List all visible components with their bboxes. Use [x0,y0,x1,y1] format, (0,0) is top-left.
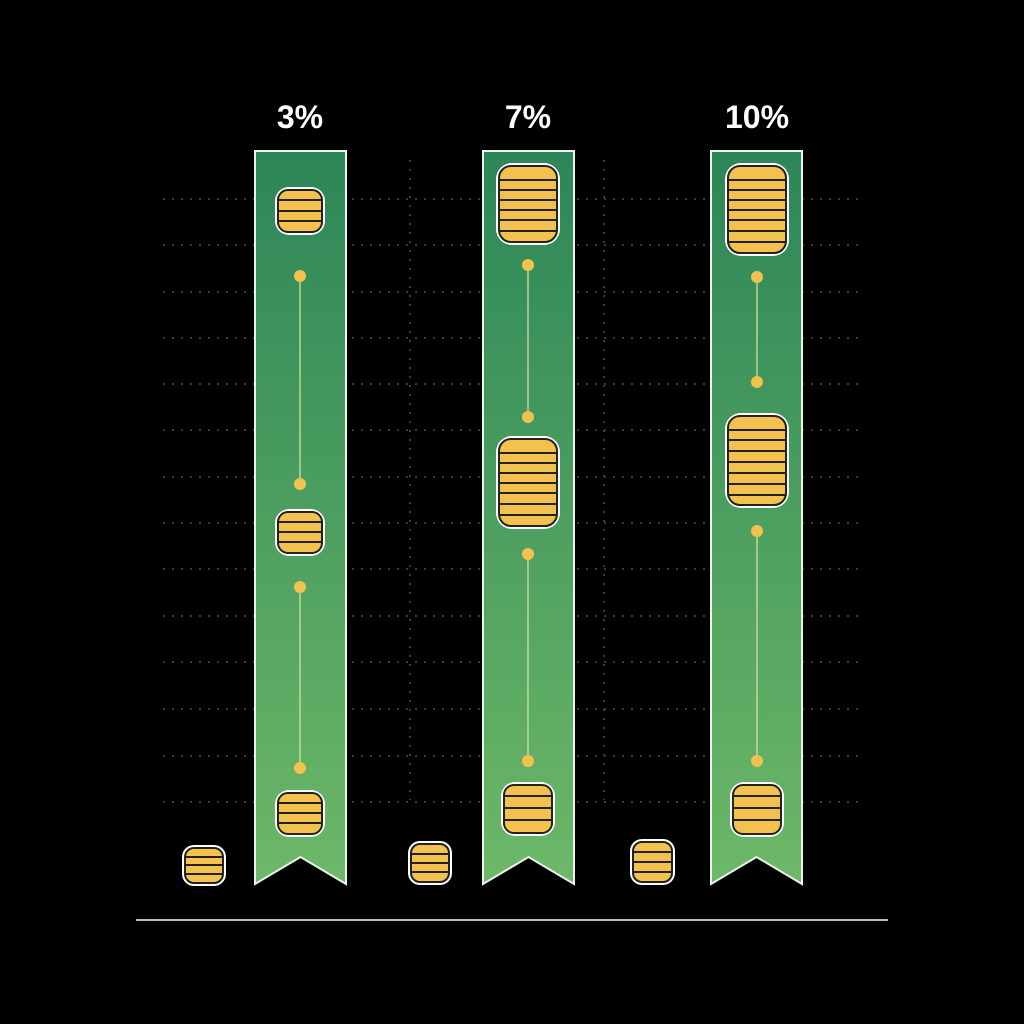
coins: 3% top [275,187,325,235]
baseline axis [136,919,888,921]
label: 3%: 3% [277,99,323,135]
coins: initial 3% [182,845,226,886]
banner: 3% [255,151,346,884]
coins: 3% middle [275,509,325,556]
timeline connectors [294,270,306,774]
coins: initial 7% [408,841,452,885]
coins: 10% top [725,163,789,256]
coins: 10% middle [725,413,789,508]
timeline connectors [522,259,534,767]
label: 7%: 7% [505,99,551,135]
timeline connectors [751,271,763,767]
coins: 3% bottom [275,790,325,837]
coins: initial 10% [630,839,675,885]
coins: 10% bottom [730,782,784,837]
banner: 7% [483,151,574,884]
coin stacks [182,163,789,886]
coins: 7% middle [496,436,560,529]
label: 10%: 10% [725,99,789,135]
coins: 7% bottom [501,782,555,836]
banner: 10% [711,151,802,884]
coins: 7% top [496,163,560,245]
